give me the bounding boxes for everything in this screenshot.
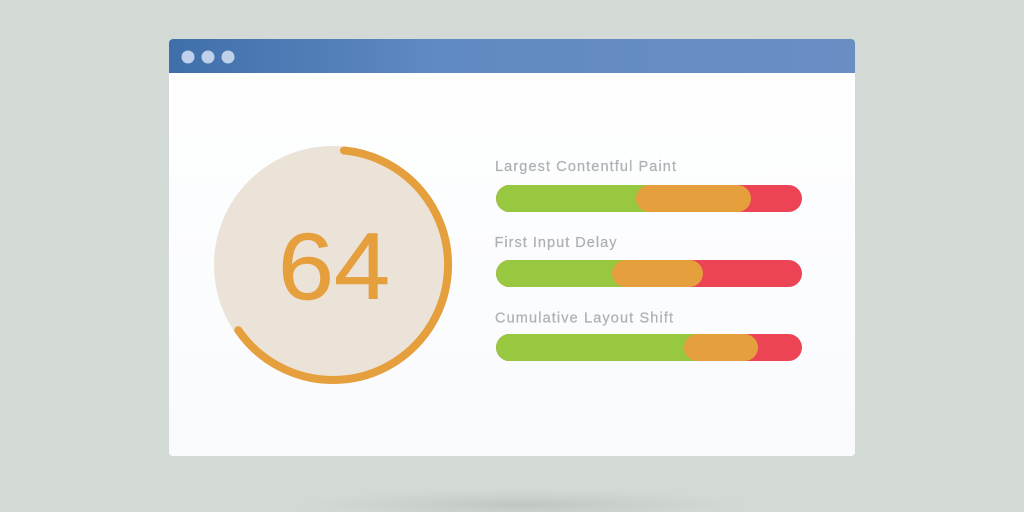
metric: First Input Delay [494, 235, 802, 287]
window control dots [182, 50, 234, 64]
bar [496, 185, 802, 212]
title bar [169, 39, 855, 73]
label: Cumulative Layout Shift [495, 310, 673, 326]
score number: 64 [278, 214, 390, 320]
label: First Input Delay [494, 235, 617, 251]
label: Largest Contentful Paint [495, 159, 676, 175]
score gauge [214, 146, 452, 384]
metric: Largest Contentful Paint [495, 159, 802, 212]
metric: Cumulative Layout Shift [495, 310, 802, 361]
bar [496, 334, 802, 361]
gauge progress arc [238, 150, 448, 380]
browser window [169, 39, 855, 456]
window shadow [263, 487, 783, 512]
gauge background disc [214, 146, 452, 384]
bar [496, 260, 802, 287]
window body [169, 39, 855, 456]
